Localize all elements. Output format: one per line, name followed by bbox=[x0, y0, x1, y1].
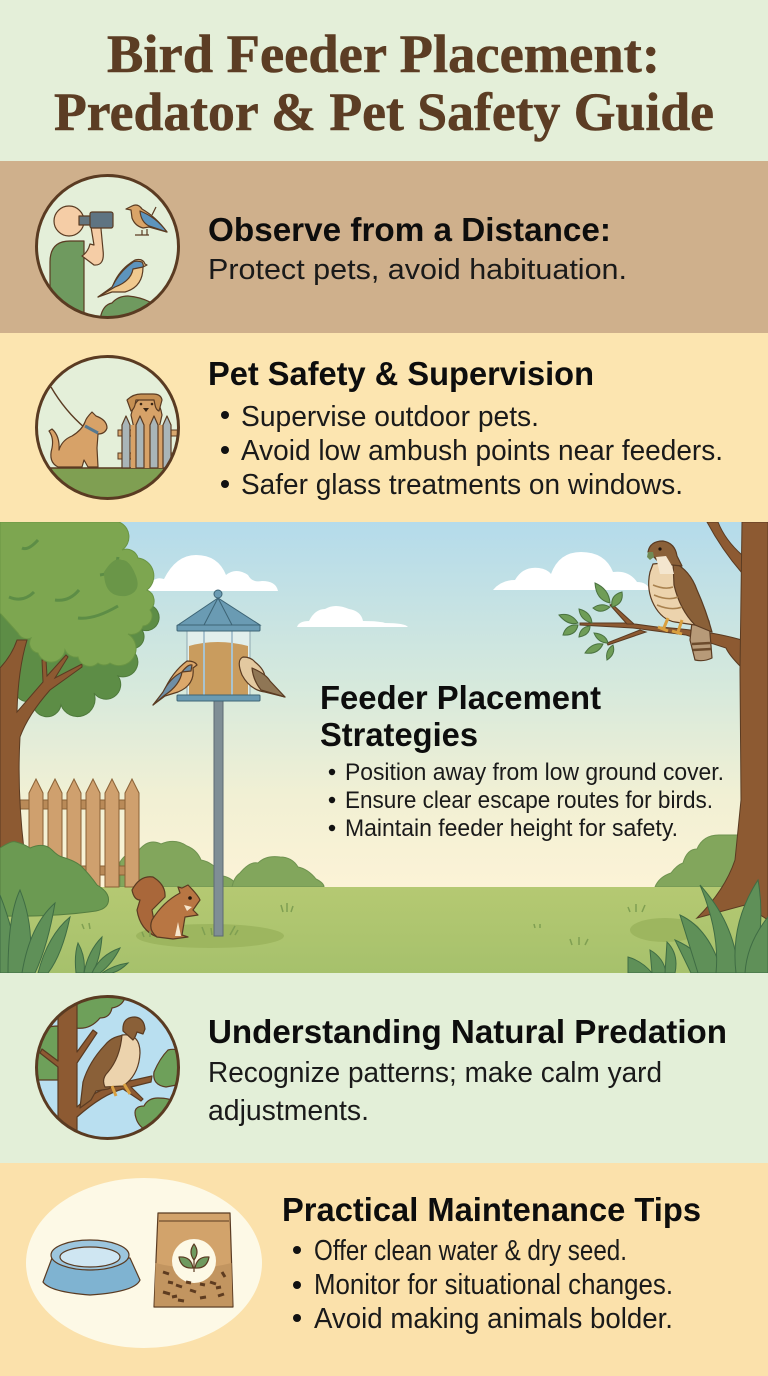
background bushes bbox=[120, 835, 744, 887]
left tree bbox=[0, 522, 159, 850]
title: Predator & Pet Safety Guide bbox=[54, 82, 714, 142]
bullet list: Offer clean water & dry seed. bbox=[314, 1235, 627, 1267]
foreground plants left bbox=[0, 890, 128, 973]
panel: pet safety and supervision bbox=[0, 333, 768, 522]
squirrel bbox=[132, 877, 200, 939]
bullet list: Avoid low ambush points near feeders. bbox=[241, 435, 723, 467]
heading: Understanding Natural Predation bbox=[208, 1013, 727, 1050]
feeder on pole with two birds bbox=[153, 590, 285, 936]
heading: feeder placement strategies: Feeder Placement bbox=[320, 679, 601, 716]
icon: water bowl bbox=[43, 1240, 140, 1295]
grass tufts bbox=[82, 903, 645, 945]
text block bbox=[208, 1057, 662, 1127]
panel: observe from a distance bbox=[0, 161, 768, 333]
right tree bbox=[580, 522, 768, 920]
panel: understanding natural predation bbox=[35, 995, 725, 1140]
bullet list: Ensure clear escape routes for birds. bbox=[345, 787, 713, 814]
feeder shadow bbox=[136, 924, 284, 948]
bullet list bbox=[221, 401, 723, 501]
bullet list: Maintain feeder height for safety. bbox=[345, 815, 678, 842]
panel: practical maintenance tips bbox=[0, 1163, 768, 1376]
icon: seed bag bbox=[154, 1213, 233, 1307]
heading: feeder placement strategies bbox=[320, 679, 601, 753]
text block: Recognize patterns; make calm yard bbox=[208, 1057, 662, 1089]
bullet list bbox=[293, 1235, 673, 1335]
bullet list: Supervise outdoor pets. bbox=[241, 401, 539, 433]
bullet list: Monitor for situational changes. bbox=[314, 1269, 673, 1301]
heading: Practical Maintenance Tips bbox=[282, 1191, 701, 1228]
panel: backyard feeder scene bbox=[0, 522, 768, 973]
heading: Observe from a Distance: bbox=[208, 211, 611, 248]
bullet list bbox=[329, 759, 724, 842]
bullet list: Safer glass treatments on windows. bbox=[241, 469, 683, 501]
icon: cat on leash and dog behind fence bbox=[30, 356, 186, 503]
fence bbox=[20, 779, 139, 887]
text block: Protect pets, avoid habituation. bbox=[208, 254, 627, 286]
foreground plants right bbox=[628, 880, 768, 973]
icon: person with binoculars watching birds bbox=[36, 176, 178, 322]
right tree leaves bbox=[559, 583, 622, 660]
clouds bbox=[140, 552, 650, 627]
hawk on branch bbox=[647, 541, 712, 661]
ground bbox=[0, 887, 768, 973]
text block: adjustments. bbox=[208, 1095, 369, 1127]
heading: feeder placement strategies: Strategies bbox=[320, 716, 478, 753]
icon: water bowl and seed bag bbox=[26, 1178, 262, 1348]
icon: hawk in tree bbox=[36, 990, 182, 1139]
bullet list: Avoid making animals bolder. bbox=[314, 1303, 673, 1335]
front left bush bbox=[0, 842, 109, 916]
heading: Pet Safety & Supervision bbox=[208, 355, 594, 392]
panel: title banner bbox=[0, 0, 768, 161]
title: Bird Feeder Placement: bbox=[107, 24, 660, 84]
bullet list: Position away from low ground cover. bbox=[345, 759, 724, 786]
title bbox=[54, 24, 714, 142]
